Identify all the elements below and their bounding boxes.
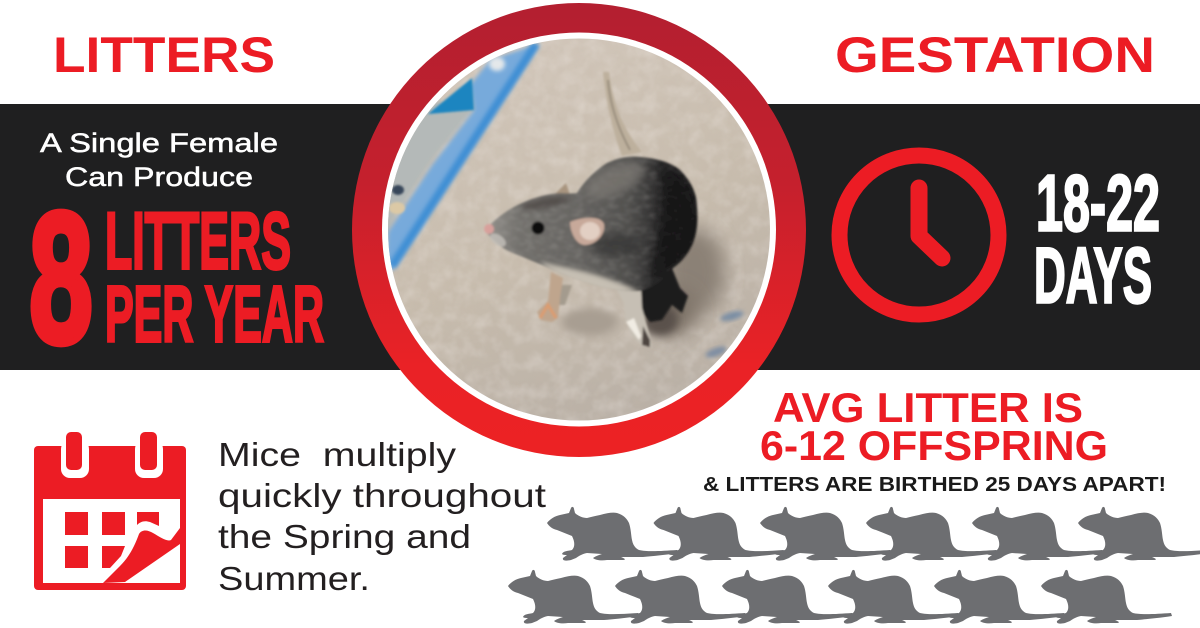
mouse photo in red ring — [352, 3, 806, 457]
stat: 8 litters per year — [29, 175, 324, 382]
mouse silhouettes row 2 — [508, 570, 1172, 624]
far front leg — [558, 285, 572, 305]
icon: calendar — [34, 432, 186, 590]
icon: clock — [840, 156, 998, 314]
text: mice multiply: the Spring and — [218, 518, 471, 555]
dark neck behind ear — [590, 233, 640, 257]
body — [485, 157, 697, 291]
stat: 8 litters per year: PER YEAR — [105, 270, 324, 358]
mouse silhouettes row 1 — [547, 507, 1200, 561]
text: avg litter is 6-12 offspring — [760, 384, 1108, 469]
stat: 18-22 days — [1034, 158, 1160, 320]
ear — [570, 218, 604, 245]
heading: gestation: GESTATION — [835, 27, 1155, 83]
dark rump — [650, 165, 698, 285]
text: mice multiply — [218, 436, 546, 597]
tail — [603, 72, 642, 156]
nose — [484, 224, 494, 234]
stat: 8 litters per year: LITTERS — [105, 196, 291, 286]
photo — [380, 30, 780, 430]
front leg — [537, 272, 563, 322]
text: a single female can produce: A Single Female — [40, 128, 278, 158]
text: a single female can produce — [40, 128, 278, 192]
text: avg litter is 6-12 offspring: 6-12 OFFSPRING — [760, 422, 1108, 469]
black band — [0, 104, 1200, 370]
hind leg — [620, 289, 652, 347]
text: mice multiply: Mice multiply — [218, 436, 457, 473]
fur texture — [504, 157, 697, 292]
dark hind foot — [640, 268, 688, 322]
red ring — [352, 3, 806, 457]
heading: litters: LITTERS — [53, 27, 275, 83]
upper back highlight — [586, 159, 648, 199]
belly — [540, 262, 640, 294]
white inner border — [382, 32, 776, 426]
brow — [520, 195, 568, 212]
text: avg litter is 6-12 offspring: AVG LITTER IS — [773, 384, 1083, 431]
text: mice multiply: Summer. — [218, 560, 370, 597]
small far ear — [556, 183, 570, 194]
muzzle highlight — [490, 232, 507, 248]
shadow — [665, 228, 725, 316]
eye — [532, 222, 544, 234]
text: a single female can produce: Can Produce — [65, 162, 253, 192]
blue ledge — [388, 100, 471, 232]
stat: 8 litters per year: 8 — [29, 175, 93, 382]
text: mice multiply: quickly throughout — [218, 477, 546, 514]
mouse figure — [484, 154, 700, 347]
text: litters birthed apart: & LITTERS ARE BIRTHED 25 DAYS APART! — [703, 474, 1166, 496]
